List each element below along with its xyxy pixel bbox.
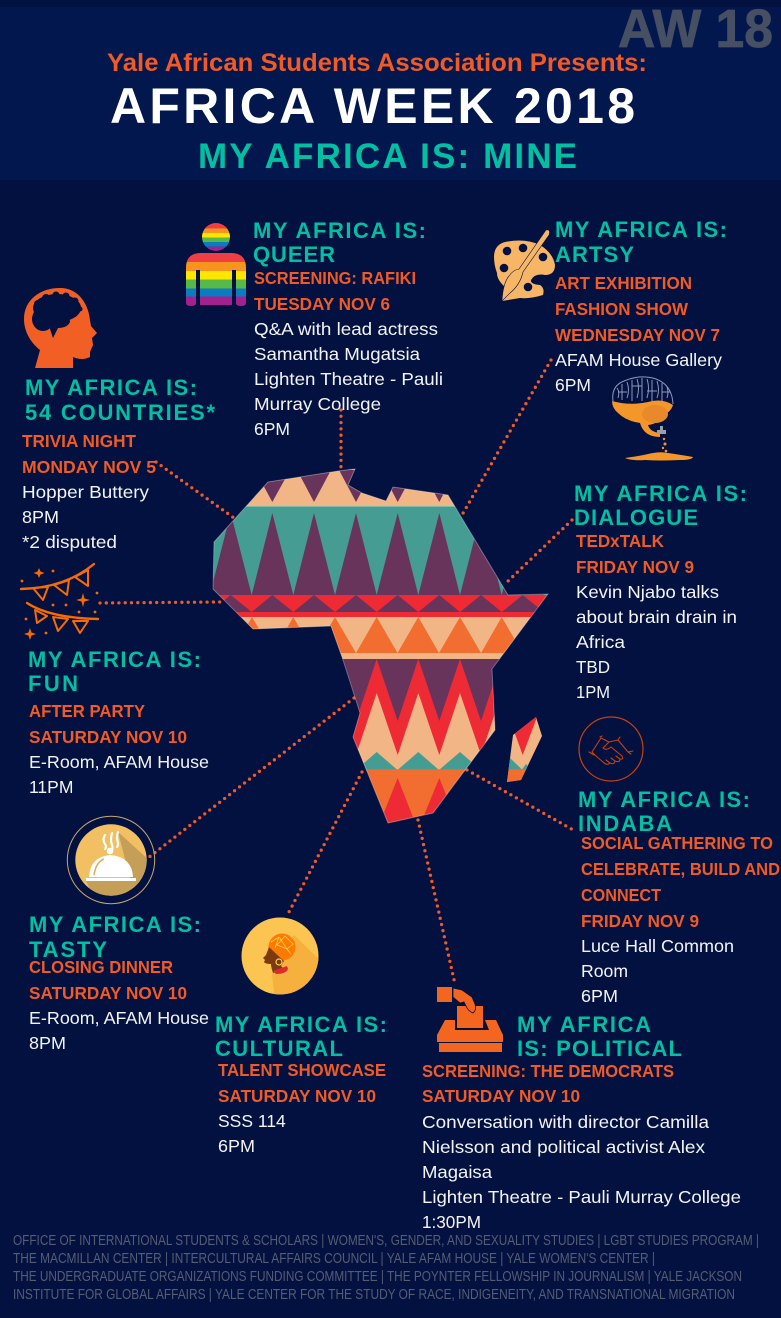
event details: SATURDAY NOV 10 — [29, 727, 187, 747]
event details: TBD — [576, 657, 610, 677]
event details: 6PM — [581, 986, 618, 1006]
event details — [22, 431, 156, 552]
event details — [581, 833, 780, 1006]
event details: Murray College — [254, 394, 381, 414]
heading: MY AFRICA IS: — [574, 481, 747, 506]
panel: tasty — [29, 816, 209, 1053]
event details: SCREENING: RAFIKI — [254, 268, 416, 288]
panel: dialogue — [574, 481, 747, 702]
event details — [29, 957, 209, 1053]
panel: 54 countries — [22, 288, 215, 552]
event details: Hopper Buttery — [22, 482, 149, 502]
event details: Room — [581, 961, 628, 981]
event details: Samantha Mugatsia — [254, 344, 420, 364]
event details: TUESDAY NOV 6 — [254, 294, 390, 314]
heading — [25, 375, 215, 425]
event details: TRIVIA NIGHT — [22, 431, 136, 451]
event details: about brain drain in — [576, 607, 737, 627]
heading: MY AFRICA IS: — [253, 218, 426, 243]
heading: IS: POLITICAL — [517, 1036, 682, 1061]
connector: dialogue to map — [505, 520, 572, 584]
heading — [253, 218, 426, 267]
panel: indaba — [578, 717, 780, 1006]
event details: AFTER PARTY — [29, 701, 145, 721]
connector: trivia to map — [156, 462, 234, 518]
heading — [517, 1012, 682, 1061]
heading: MY AFRICA IS: — [578, 787, 750, 812]
watermark: AW 18: AW 18 — [618, 0, 773, 59]
panel: political — [422, 987, 741, 1232]
heading — [215, 1012, 387, 1061]
connector: political to map — [418, 820, 455, 984]
heading: FUN — [28, 671, 78, 696]
event details: AFAM House Gallery — [555, 350, 722, 370]
event details: SATURDAY NOV 10 — [422, 1086, 580, 1106]
event details: TALENT SHOWCASE — [218, 1060, 386, 1080]
icon: bunting — [21, 564, 98, 640]
event details: Lighten Theatre - Pauli — [254, 369, 443, 389]
map: Madagascar — [507, 717, 542, 782]
event details — [218, 1060, 386, 1156]
heading: CULTURAL — [215, 1036, 343, 1061]
panel: queer — [186, 218, 443, 439]
event details: 6PM — [555, 375, 591, 395]
event details: 8PM — [22, 507, 59, 527]
heading: MY AFRICA IS: — [215, 1012, 387, 1037]
connector: tasty to map — [148, 698, 354, 858]
heading: TASTY — [29, 937, 107, 962]
panel: cultural — [215, 918, 387, 1156]
event details: 6PM — [218, 1136, 255, 1156]
connector: queer to map — [339, 410, 343, 468]
event details: Kevin Njabo talks — [576, 582, 719, 602]
event details: E-Room, AFAM House — [29, 752, 209, 772]
event details: Africa — [576, 632, 625, 652]
event details: SATURDAY NOV 10 — [218, 1086, 376, 1106]
event details: SOCIAL GATHERING TO — [581, 833, 773, 853]
icon: handshake — [579, 717, 643, 781]
header band — [0, 7, 781, 180]
event details: 11PM — [29, 777, 73, 797]
heading: ARTSY — [555, 242, 634, 267]
event details: 1:30PM — [422, 1212, 481, 1232]
event details — [29, 701, 209, 797]
panel: artsy — [494, 217, 727, 395]
connector: artsy to map — [462, 360, 551, 515]
heading: MY AFRICA IS: — [25, 375, 197, 400]
heading: MY AFRICA IS: — [29, 912, 201, 937]
event details: CLOSING DINNER — [29, 957, 173, 977]
event details — [555, 273, 722, 395]
event details: FRIDAY NOV 9 — [581, 911, 699, 931]
event details — [254, 268, 443, 439]
event details: E-Room, AFAM House — [29, 1008, 209, 1028]
connector: cultural to map — [289, 772, 362, 912]
connector: indaba to map — [467, 770, 575, 831]
heading — [574, 481, 747, 530]
event details: Magaisa — [422, 1162, 492, 1182]
heading: DIALOGUE — [574, 505, 698, 530]
icon: rainbow person — [186, 223, 246, 306]
footer: sponsors: THE MACMILLAN CENTER | INTERCULTURAL AFFAIRS COUNCIL | YALE AFAM HOUSE | YALE WOMEN'S CENTER | — [13, 1251, 655, 1267]
event details: MONDAY NOV 5 — [22, 457, 156, 477]
event details: 1PM — [576, 682, 610, 702]
heading: QUEER — [253, 242, 335, 267]
subtitle: MY AFRICA IS: MINE — [198, 137, 577, 176]
icon: paint palette — [494, 230, 555, 301]
heading: MY AFRICA IS: — [28, 647, 201, 672]
footer: sponsors — [13, 1233, 759, 1303]
presenter line: Yale African Students Association Presents: — [107, 49, 647, 77]
event details: Q&A with lead actress — [254, 319, 438, 339]
event details: Lighten Theatre - Pauli Murray College — [422, 1187, 741, 1207]
event details — [576, 531, 737, 702]
event details: *2 disputed — [22, 532, 117, 552]
title: AFRICA WEEK 2018 — [110, 78, 635, 134]
heading: MY AFRICA IS: — [555, 217, 727, 242]
heading: 54 COUNTRIES* — [25, 400, 215, 425]
event details: TEDxTALK — [576, 531, 664, 551]
heading: MY AFRICA — [517, 1012, 651, 1037]
heading — [555, 217, 727, 267]
heading — [28, 647, 201, 696]
event details: Conversation with director Camilla — [422, 1112, 709, 1132]
icon: woman in head wrap — [242, 918, 318, 994]
event details: ART EXHIBITION — [555, 273, 692, 293]
event details: FASHION SHOW — [555, 299, 688, 319]
panel: fun — [21, 564, 209, 797]
icon: ballot box — [437, 987, 503, 1052]
event details: 6PM — [254, 419, 290, 439]
heading — [29, 912, 201, 962]
event details — [422, 1061, 741, 1232]
connector: fun to map — [100, 602, 220, 603]
icon: head with brain — [24, 288, 97, 368]
event details: FRIDAY NOV 9 — [576, 557, 694, 577]
heading: INDABA — [578, 811, 672, 836]
event details: SSS 114 — [218, 1111, 286, 1131]
icon: brain drain — [612, 377, 693, 460]
event details: SATURDAY NOV 10 — [29, 983, 187, 1003]
event details: CONNECT — [581, 885, 661, 905]
event details: Luce Hall Common — [581, 936, 734, 956]
event details: 8PM — [29, 1033, 66, 1053]
icon: serving dish — [67, 816, 160, 910]
event details: SCREENING: THE DEMOCRATS — [422, 1061, 674, 1081]
event details: WEDNESDAY NOV 7 — [555, 325, 720, 345]
heading — [578, 787, 750, 836]
map of Africa — [212, 468, 549, 824]
event details: Nielsson and political activist Alex — [422, 1137, 705, 1157]
